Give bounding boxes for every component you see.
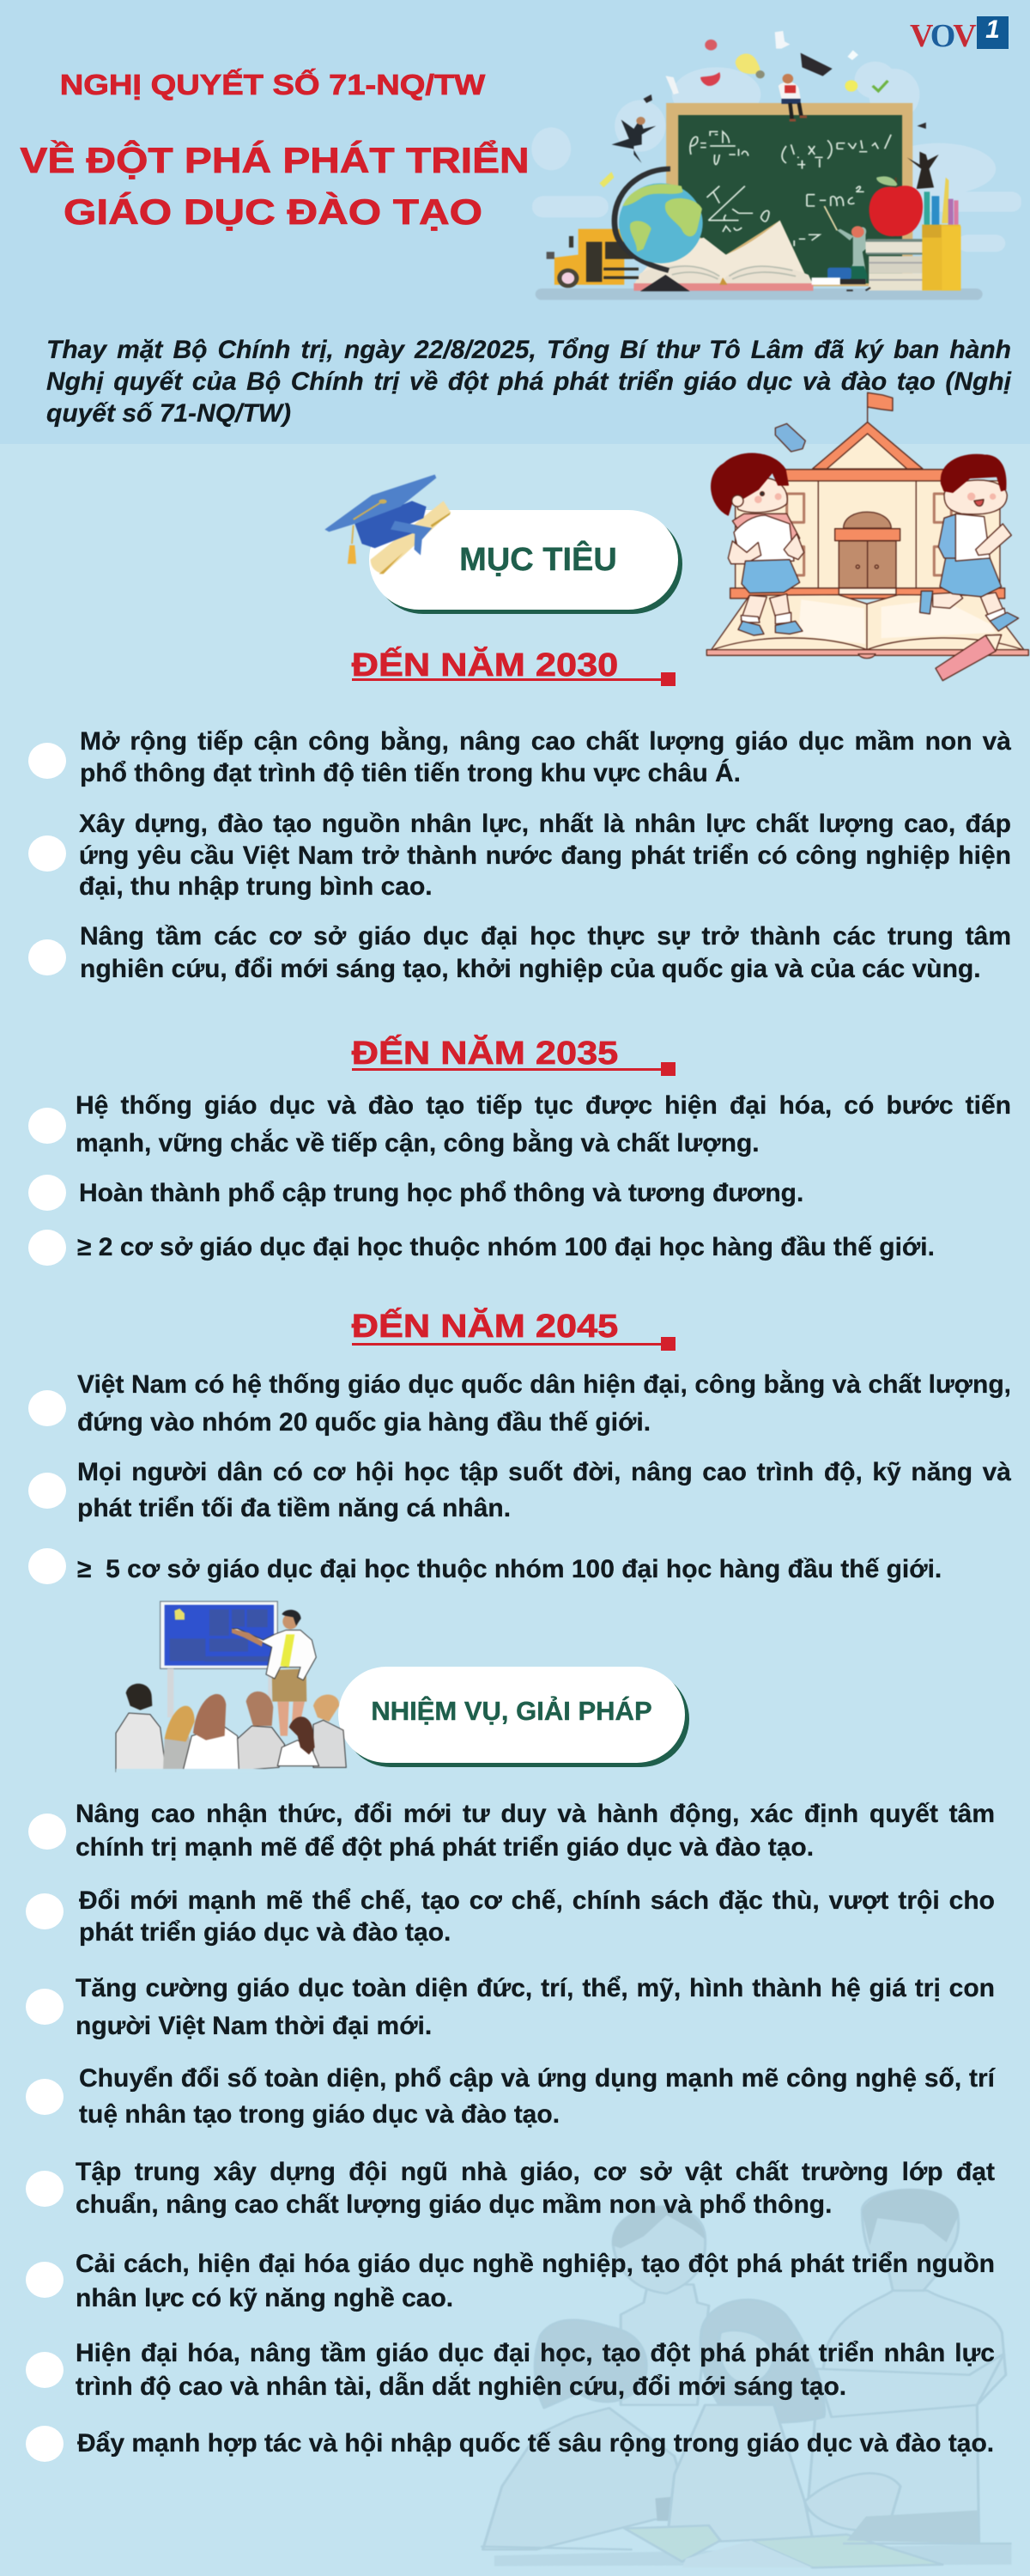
task 6: nhân lực có kỹ năng nghề cao. [76,2284,453,2312]
audience [116,1713,166,1771]
title: NGHỊ QUYẾT SỐ 71-NQ/TW [60,69,485,100]
task 5 [26,2158,995,2219]
goal 1: mạnh, vững chắc về tiếp cận, công bằng và chất lượng. [76,1129,760,1157]
goal 1 [28,1370,1011,1437]
task 2: phát triển giáo dục và đào tạo. [79,1918,451,1947]
task 3: Tăng cường giáo dục toàn diện đức, trí, thể, mỹ, hình thành hệ giá trị con [76,1974,995,2002]
girl [741,594,790,623]
sitting student [779,74,807,120]
task 1: chính trị mạnh mẽ để đột phá phát triển giáo dục và đào tạo. [76,1833,814,1862]
task 1: Nâng cao nhận thức, đổi mới tư duy và hành động, xác định quyết tâm [76,1800,995,1828]
goal 3: nghiên cứu, đổi mới sáng tạo, khởi nghiệp của quốc gia và của các vùng. [80,955,981,983]
task 3 [26,1974,995,2040]
logo: VOV1 [910,15,1009,54]
goal 2: đại, thu nhập trung bình cao. [79,872,433,901]
intro paragraph: Thay mặt Bộ Chính trị, ngày 22/8/2025, Tổng Bí thư Tô Lâm đã ký ban hành [46,336,1011,364]
goal 2 [28,1458,1011,1522]
goal 3: Nâng tầm các cơ sở giáo dục đại học thực sự trở thành các trung tâm [80,922,1011,951]
task 5: chuẩn, nâng cao chất lượng giáo dục mầm non và phổ thông. [76,2190,832,2219]
logo: VOV1: 1 [985,15,1000,44]
goal 2: Xây dựng, đào tạo nguồn nhân lực, nhất là nhân lực chất lượng cao, đáp [79,810,1011,838]
title: VỀ ĐỘT PHÁ PHÁT TRIỂN [20,140,530,180]
header background band [0,0,1030,444]
heading: 2030: ĐẾN NĂM 2030 [352,647,618,683]
goal 1 [28,726,1011,787]
section: Đến năm 2035 [28,1034,1011,1266]
section: Đến năm 2030 [28,646,1011,983]
floating icons [599,31,939,189]
panel: Nhiệm vụ list [26,1800,996,2462]
heading: Nhiệm vụ, giải pháp: NHIỆM VỤ, GIẢI PHÁP [371,1696,652,1726]
goal 1: phổ thông đạt trình độ tiên tiến trong khu vực châu Á. [80,759,741,787]
intro paragraph [46,336,1012,428]
goal 2: phát triển tối đa tiềm năng cá nhân. [77,1494,511,1522]
title: GIÁO DỤC ĐÀO TẠO [64,191,482,232]
task 6 [26,2250,995,2312]
task 4 [26,2064,996,2129]
heading: 2035: ĐẾN NĂM 2035 [352,1036,618,1072]
task 7: trình độ cao và nhân tài, dẫn dắt nghiên cứu, đổi mới sáng tạo. [76,2372,846,2401]
goal 3: ≥ 2 cơ sở giáo dục đại học thuộc nhóm 100 đại học hàng đầu thế giới. [77,1233,935,1261]
task 2: Đổi mới mạnh mẽ thể chế, tạo cơ chế, chính sách đặc thù, vượt trội cho [79,1886,995,1915]
goal 2: Hoàn thành phổ cập trung học phổ thông và tương đương. [79,1179,803,1207]
goal 1: Việt Nam có hệ thống giáo dục quốc dân hiện đại, công bằng và chất lượng, [77,1370,1011,1399]
boy [920,591,933,614]
goal 2: Mọi người dân có cơ hội học tập suốt đời, nâng cao trình độ, kỹ năng và [77,1458,1011,1486]
goal 1: Mở rộng tiếp cận công bằng, nâng cao chất lượng giáo dục mầm non và [80,727,1011,756]
task 1 [28,1800,995,1862]
task 3: người Việt Nam thời đại mới. [76,2012,432,2040]
logo: VOV1: VOV [910,18,974,54]
task 5: Tập trung xây dựng đội ngũ nhà giáo, cơ sở vật chất trường lớp đạt [76,2158,995,2186]
goal 3: ≥ 5 cơ sở giáo dục đại học thuộc nhóm 100 đại học hàng đầu thế giới. [77,1555,942,1583]
heading: 2045: ĐẾN NĂM 2045 [352,1309,618,1345]
goal 1 [28,1091,1011,1157]
task 4: tuệ nhân tạo trong giáo dục và đào tạo. [79,2100,560,2129]
panel: Nhiệm vụ, giải pháp pill [338,1667,685,1763]
intro paragraph: Nghị quyết của Bộ Chính trị về đột phá phát triển giáo dục và đào tạo (Nghị [46,368,1011,396]
task 7: Hiện đại hóa, nâng tầm giáo dục đại học, tạo đột phá phát triển nhân lực [76,2339,995,2367]
section: Đến năm 2045 [28,1307,1011,1584]
title [20,69,530,232]
goal 2: ứng yêu cầu Việt Nam trở thành nước đang phát triển có công nghiệp hiện [79,841,1011,870]
panel: MỤC TIÊU pill [369,510,678,610]
task 2 [26,1886,995,1947]
goal 3 [28,922,1011,983]
goal 1: đứng vào nhóm 20 quốc gia hàng đầu thế giới. [77,1408,651,1437]
goal 2 [28,810,1011,901]
task 6: Cải cách, hiện đại hóa giáo dục nghề nghiệp, tạo đột phá phát triển nguồn [76,2250,995,2278]
intro paragraph: quyết số 71-NQ/TW) [46,399,291,428]
heading: Mục tiêu: MỤC TIÊU [459,542,617,578]
task 7 [26,2339,995,2401]
task 4: Chuyển đổi số toàn diện, phổ cập và ứng dụng mạnh mẽ công nghệ số, trí [79,2064,995,2093]
goal 1: Hệ thống giáo dục và đào tạo tiếp tục được hiện đại hóa, có bước tiến [76,1091,1011,1120]
task 8: Đẩy mạnh hợp tác và hội nhập quốc tế sâu rộng trong giáo dục và đào tạo. [77,2429,994,2458]
